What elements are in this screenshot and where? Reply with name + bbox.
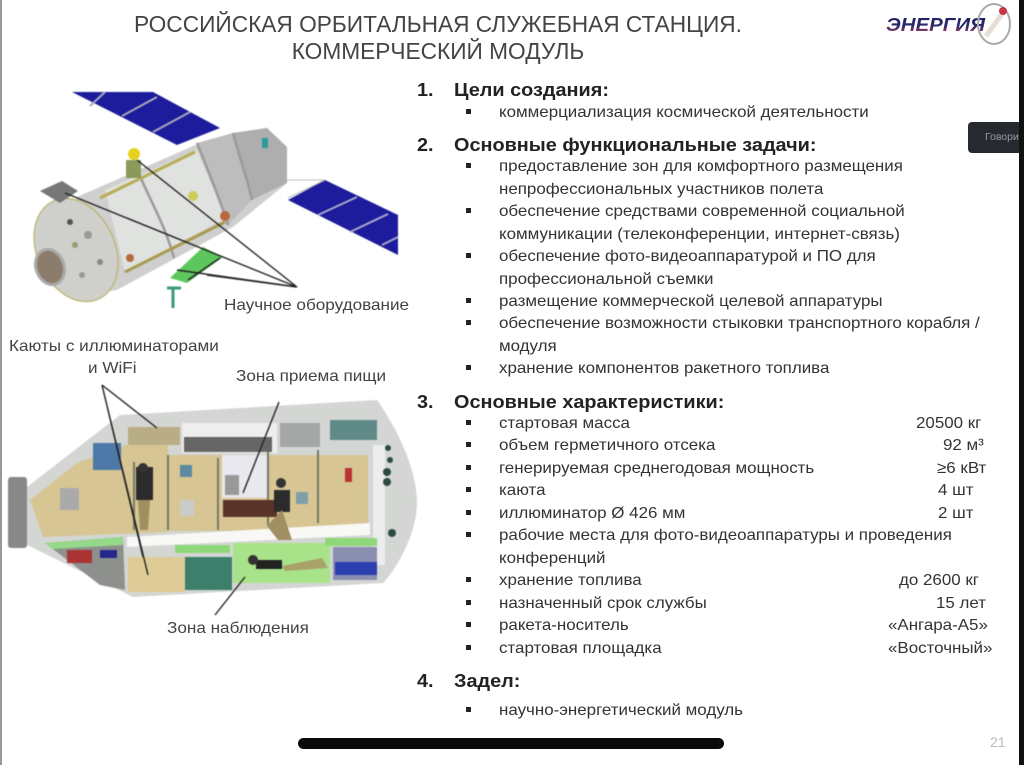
left screen edge xyxy=(0,0,2,765)
list 2: хранение компонентов ракетного топлива xyxy=(499,360,829,377)
pointer lines xyxy=(102,385,279,615)
logo: Energia: ЭНЕРГИЯ xyxy=(886,15,986,35)
diagram: station interior xyxy=(7,384,418,616)
list 3: конференций xyxy=(499,550,605,567)
list 2 xyxy=(466,158,980,377)
list 3: хранение топлива xyxy=(499,572,642,589)
title xyxy=(134,11,742,64)
list 2: размещение коммерческой целевой аппаратуры xyxy=(499,293,883,310)
list 2: обеспечение возможности стыковки транспортного корабля / xyxy=(499,315,980,332)
list 3: 4 шт xyxy=(938,482,973,499)
right screen edge xyxy=(1019,0,1024,765)
title: РОССИЙСКАЯ ОРБИТАЛЬНАЯ СЛУЖЕБНАЯ СТАНЦИЯ. xyxy=(134,11,742,37)
list 3: назначенный срок службы xyxy=(499,595,707,612)
table xyxy=(223,500,277,517)
list 2: обеспечение фото-видеоаппаратурой и ПО для xyxy=(499,248,876,265)
title: КОММЕРЧЕСКИЙ МОДУЛЬ xyxy=(292,38,584,64)
crew figures xyxy=(136,463,328,571)
lower green zone xyxy=(45,537,377,592)
list 3: «Восточный» xyxy=(888,640,992,657)
tooltip: Говорит xyxy=(968,122,1019,153)
label: observation zone: Зона наблюдения xyxy=(167,620,309,637)
list 2: модуля xyxy=(499,338,557,355)
module body xyxy=(18,128,287,315)
heading 3: 3. xyxy=(417,392,434,412)
green equipment xyxy=(167,247,223,308)
solar panel: lower xyxy=(287,180,398,255)
list 2: предоставление зон для комфортного размещения xyxy=(499,158,903,175)
list 1: коммерциализация космической деятельности xyxy=(499,104,869,121)
list 2: непрофессиональных участников полета xyxy=(499,181,823,198)
logo: Energia xyxy=(886,3,1011,45)
list 3: иллюминатор Ø 426 мм xyxy=(499,505,685,522)
diagram: station exterior xyxy=(32,91,399,309)
heading 2: 2. xyxy=(417,135,434,155)
list 3: объем герметичного отсека xyxy=(499,437,715,454)
page number: 21 xyxy=(990,734,1006,750)
heading 1: Цели создания: xyxy=(454,80,609,100)
list 3: стартовая площадка xyxy=(499,640,662,657)
label: cabins: и WiFi xyxy=(88,360,137,377)
heading 3: Основные характеристики: xyxy=(454,392,724,412)
list 2: коммуникации (телеконференции, интернет-связь) xyxy=(499,226,900,243)
list 3: генерируемая среднегодовая мощность xyxy=(499,460,814,477)
list 4: научно-энергетический модуль xyxy=(499,702,743,719)
list 3: 2 шт xyxy=(938,505,973,522)
list 3: каюта xyxy=(499,482,546,499)
yellow equipment xyxy=(126,148,141,178)
list 3: 92 м³ xyxy=(943,437,984,454)
list 3: до 2600 кг xyxy=(899,572,979,589)
label: cabins xyxy=(9,338,219,377)
list 3: 20500 кг xyxy=(916,415,981,432)
list 3: стартовая масса xyxy=(499,415,630,432)
interior wall xyxy=(30,420,385,565)
grey equipment xyxy=(40,181,78,203)
floor xyxy=(127,523,370,547)
heading 4: 4. xyxy=(417,671,434,691)
list 2: обеспечение средствами современной социальной xyxy=(499,203,905,220)
heading 2: Основные функциональные задачи: xyxy=(454,135,816,155)
list 2: профессиональной съемки xyxy=(499,271,713,288)
list 3: ракета-носитель xyxy=(499,617,629,634)
label: cabins: Каюты с иллюминаторами xyxy=(9,338,219,355)
heading 1: 1. xyxy=(417,80,434,100)
list 3 xyxy=(466,415,992,657)
list 3: рабочие места для фото-видеоаппаратуры и проведения xyxy=(499,527,952,544)
list 3: 15 лет xyxy=(936,595,986,612)
label: science equipment: Научное оборудование xyxy=(224,297,409,314)
list 3: «Ангара-А5» xyxy=(888,617,988,634)
heading 4 xyxy=(417,671,520,691)
solar panel: upper xyxy=(72,92,220,145)
label: dining zone: Зона приема пищи xyxy=(236,368,386,385)
home indicator bar xyxy=(298,738,724,749)
heading 4: Задел: xyxy=(454,671,520,691)
list 3: ≥6 кВт xyxy=(937,460,986,477)
pointer lines xyxy=(65,160,297,287)
windows xyxy=(383,445,396,537)
